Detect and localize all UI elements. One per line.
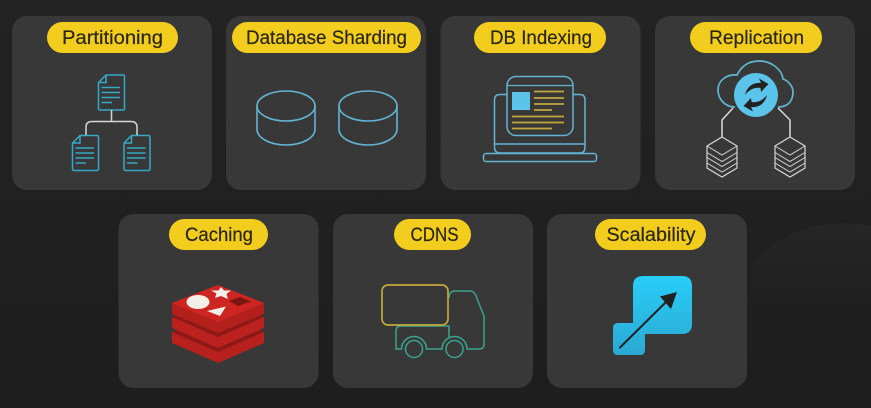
heading: Partitioning: Partitioning: [62, 28, 163, 49]
icon: document hierarchy: [72, 75, 150, 170]
heading: Scalability: Scalability: [606, 225, 696, 246]
heading: Caching: [169, 219, 268, 250]
heading: Replication: [690, 22, 822, 53]
heading: Caching: Caching: [185, 225, 253, 246]
panel: Partitioning: [12, 16, 212, 190]
heading: CDNS: [394, 219, 471, 250]
icon: laptop with indexed page: [484, 76, 596, 162]
icon: delivery truck: [382, 285, 484, 358]
heading: Database Sharding: Database Sharding: [246, 28, 407, 49]
heading: DB Indexing: DB Indexing: [490, 28, 592, 49]
panel: Database Sharding: [226, 16, 426, 190]
icon: Redis stack: [172, 285, 264, 363]
icon: scale-up arrow: [613, 276, 692, 355]
heading: Partitioning: [47, 22, 178, 53]
panel: Scalability: [547, 214, 747, 388]
icon: cloud sync with servers: [707, 61, 805, 177]
heading: Replication: Replication: [709, 28, 804, 49]
heading: CDNS: CDNS: [410, 225, 458, 246]
panel: DB Indexing: [440, 16, 640, 190]
heading: Database Sharding: [232, 22, 421, 53]
icon: database shard two: [339, 91, 397, 145]
panel: CDNS: [333, 214, 533, 388]
heading: DB Indexing: [474, 22, 606, 53]
heading: Scalability: [595, 219, 706, 250]
panel: Replication: [655, 16, 855, 190]
panel: Caching: [118, 214, 318, 388]
icon: database shard one: [257, 91, 315, 145]
